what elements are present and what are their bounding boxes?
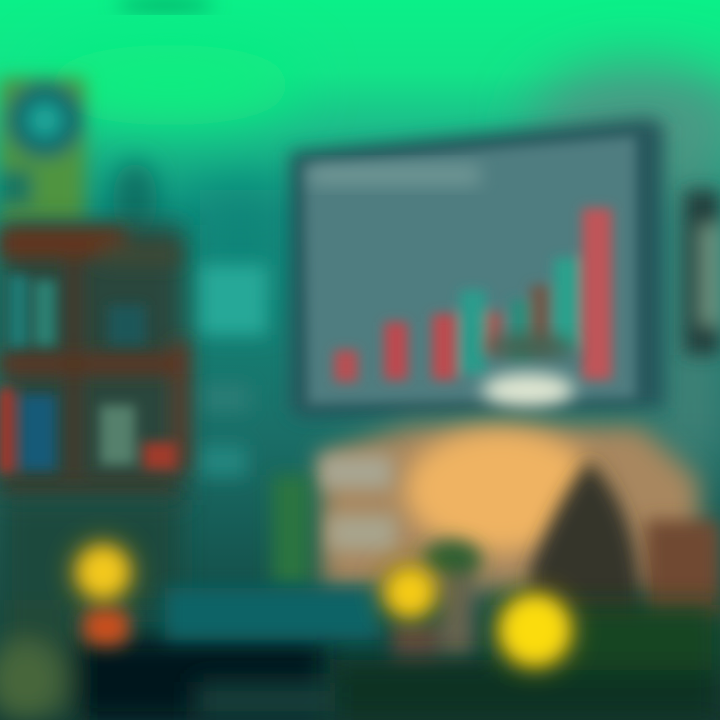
monitor white lamp [482, 373, 574, 407]
monitor frame [290, 118, 664, 418]
bar chart [334, 208, 612, 382]
right cabinet [645, 520, 720, 620]
top dark lamp [115, 0, 215, 10]
desk with warm light [320, 425, 720, 620]
warm desk glow [320, 425, 700, 590]
books [0, 275, 177, 473]
desk papers [320, 455, 396, 551]
bookshelf [0, 225, 190, 505]
monitor [290, 118, 664, 418]
shelf body [0, 225, 185, 505]
center plant [272, 475, 482, 667]
wall glow [40, 45, 720, 470]
shelf boards [0, 228, 190, 492]
light cores [79, 548, 568, 663]
chart figure [485, 335, 575, 359]
wall badge: olive panel and teal circle [0, 78, 85, 223]
wall plant silhouette [113, 162, 157, 238]
lower left dark area [0, 500, 325, 720]
chart title [310, 165, 480, 185]
monitor screen [304, 136, 636, 404]
teal wall panels [197, 265, 267, 477]
floor [195, 605, 720, 720]
yellow lights [71, 540, 575, 670]
person silhouette [530, 460, 640, 640]
right wall frame [684, 190, 720, 355]
teal sofa [165, 588, 380, 640]
light glow halos [71, 540, 575, 670]
